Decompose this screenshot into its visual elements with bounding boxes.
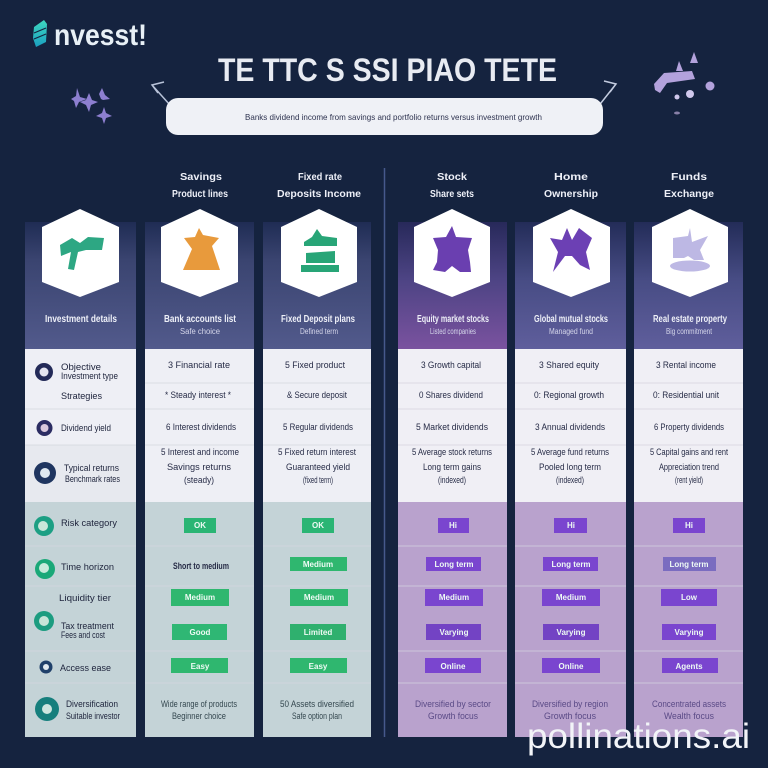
row labels: Diversification <box>66 699 118 709</box>
panel: column 4: 3 Growth capital <box>421 360 481 370</box>
status badges: Hi <box>449 521 457 530</box>
status badges: Varying <box>440 628 469 637</box>
status badges: Low <box>681 593 698 602</box>
icon: arrow left <box>152 82 170 105</box>
panel: column 2 <box>145 209 254 737</box>
panel: column 2: Safe choice <box>180 327 221 336</box>
status badges: Long term <box>669 560 709 569</box>
panel: column 2: Beginner choice <box>172 711 226 721</box>
panel: column 3: Defined term <box>300 327 338 336</box>
status badges: Online <box>559 662 584 671</box>
panel: column 4: 0 Shares dividend <box>419 390 483 400</box>
panel: column 2: Savings returns <box>167 462 232 472</box>
panel: column 3: Safe option plan <box>292 711 342 721</box>
panel: column 6: 6 Property dividends <box>654 422 724 432</box>
status badges <box>171 518 229 673</box>
column headings: Product lines <box>172 189 228 200</box>
status badges: Medium <box>556 593 586 602</box>
panel: column 5 <box>515 209 626 737</box>
panel: column 6: Real estate property <box>653 314 727 325</box>
column headings: Exchange <box>664 189 714 200</box>
icon: purple tower <box>433 226 472 272</box>
panel: column 5: 0: Regional growth <box>534 390 604 400</box>
panel: column 2: Wide range of products <box>161 699 237 709</box>
panel: column 3: Fixed Deposit plans <box>281 314 355 325</box>
panel: column 2: 5 Interest and income <box>161 447 239 457</box>
panel: column 6: 5 Capital gains and rent <box>650 447 728 457</box>
panel: column 6: (rent yield) <box>675 475 703 485</box>
status badges <box>542 518 600 673</box>
divider <box>384 168 386 737</box>
panel: column 5: (indexed) <box>556 475 584 485</box>
status badges: Agents <box>675 662 703 671</box>
panel: column 4: (indexed) <box>438 475 466 485</box>
panel: column 3: 5 Regular dividends <box>283 422 353 432</box>
logo wordmark: nvesst! <box>54 19 147 52</box>
panel: column 2: (steady) <box>184 475 214 485</box>
panel: column 2: 6 Interest dividends <box>166 422 236 432</box>
panel: column 5: 3 Annual dividends <box>535 422 605 432</box>
row labels <box>59 362 120 721</box>
row labels: Typical returns <box>64 463 119 473</box>
panel: column 3: Guaranteed yield <box>286 462 350 472</box>
logo <box>33 19 147 52</box>
row labels: Investment type <box>61 371 118 381</box>
icon: pale lavender figure <box>670 228 710 272</box>
column headings: Fixed rate <box>298 172 342 183</box>
status badges: Long term <box>434 560 474 569</box>
status badges: Medium <box>303 560 333 569</box>
status badges: Hi <box>685 521 693 530</box>
icon: arrow right <box>597 81 616 108</box>
status badges <box>290 518 348 673</box>
panel: column 3: 5 Fixed product <box>285 360 345 370</box>
status badges: Varying <box>675 628 704 637</box>
panel: column 4: Diversified by sector <box>415 699 491 709</box>
panel: column 6: 0: Residential unit <box>653 390 719 400</box>
panel: column 6: Wealth focus <box>664 711 714 721</box>
subtitle pill <box>166 98 603 135</box>
title: TE TTC S SSI PIAO TETE <box>218 52 557 88</box>
panel: column 5: 3 Shared equity <box>539 360 599 370</box>
row labels: Risk category <box>61 518 118 528</box>
status badges: Easy <box>191 662 210 671</box>
status badges: Short to medium <box>173 561 229 571</box>
panel: column 3: (fixed term) <box>303 475 333 485</box>
panel: column 5: Global mutual stocks <box>534 314 608 325</box>
icon: logo mark <box>33 20 47 47</box>
status badges: Varying <box>557 628 586 637</box>
panel: column 4: Growth focus <box>428 711 478 721</box>
panel: column 5: 5 Average fund returns <box>531 447 609 457</box>
watermark: pollinations.ai <box>527 717 750 756</box>
row labels: Time horizon <box>61 562 114 572</box>
panel: features column: Investment details <box>45 314 117 325</box>
panel: column 4: 5 Average stock returns <box>412 447 492 457</box>
panel: column 2: * Steady interest * <box>165 390 231 400</box>
column headings: Stock <box>437 172 467 183</box>
panel: column 6: 3 Rental income <box>656 360 716 370</box>
row labels: Liquidity tier <box>59 593 111 603</box>
status badges: Medium <box>439 593 469 602</box>
column headings <box>172 172 714 200</box>
row labels: Access ease <box>60 663 111 673</box>
panel: column 4: Long term gains <box>423 462 481 472</box>
panel: column 3: 50 Assets diversified <box>280 699 354 709</box>
row labels: Dividend yield <box>61 423 111 433</box>
row labels: Strategies <box>61 391 102 401</box>
panel: column 6: Appreciation trend <box>659 462 719 472</box>
column headings: Ownership <box>544 189 598 200</box>
icon: orange star <box>183 228 220 270</box>
panel: column 5: Managed fund <box>549 327 593 336</box>
panel: column 5: Pooled long term <box>539 462 601 472</box>
status badges: Limited <box>304 628 332 637</box>
panel: column 2: 3 Financial rate <box>168 360 230 370</box>
status badges: Medium <box>185 593 215 602</box>
column headings: Funds <box>671 172 708 183</box>
panel: column 4: 5 Market dividends <box>416 422 488 432</box>
panel: column 6 <box>634 209 743 737</box>
panel: column 3 <box>263 209 371 737</box>
icon: sparkles left <box>71 88 112 124</box>
status badges: Hi <box>567 521 575 530</box>
panel: column 4: Listed companies <box>430 327 476 336</box>
row labels: Tax treatment <box>61 621 114 631</box>
panel: column 4 <box>398 209 507 737</box>
row labels: Objective <box>61 362 101 372</box>
panel: column 3: 5 Fixed return interest <box>278 447 356 457</box>
panel: column 2: Bank accounts list <box>164 314 237 325</box>
row icons <box>34 363 59 721</box>
status badges: Good <box>190 628 211 637</box>
column headings: Savings <box>180 172 222 183</box>
status badges: Long term <box>551 560 591 569</box>
row labels: Benchmark rates <box>65 474 120 484</box>
row labels: Fees and cost <box>61 630 105 640</box>
panel: column 5: Diversified by region <box>532 699 608 709</box>
status badges <box>661 518 718 673</box>
panel: features column <box>25 209 136 737</box>
status badges: OK <box>194 521 206 530</box>
icon: green stacked building <box>301 229 339 272</box>
panel: column 6: Big commitment <box>666 327 713 336</box>
panel: column 5: Growth focus <box>544 711 596 721</box>
subtitle text: Banks dividend income from savings and portfolio returns versus investment growth <box>245 112 542 122</box>
icon: purple cloud cluster <box>654 52 714 114</box>
column headings: Share sets <box>430 189 474 200</box>
status badges: Easy <box>309 662 328 671</box>
column headings: Deposits Income <box>277 189 361 200</box>
panel: column 3: & Secure deposit <box>287 390 347 400</box>
panel: column 6: Concentrated assets <box>652 699 726 709</box>
status badges: Medium <box>304 593 334 602</box>
status badges <box>425 518 483 673</box>
status badges: OK <box>312 521 324 530</box>
icon: purple star <box>550 228 592 272</box>
column headings: Home <box>554 172 589 183</box>
row labels: Suitable investor <box>66 711 120 721</box>
panel: column 4: Equity market stocks <box>417 314 489 325</box>
status badges: Online <box>441 662 466 671</box>
icon: green sprout <box>60 237 104 270</box>
